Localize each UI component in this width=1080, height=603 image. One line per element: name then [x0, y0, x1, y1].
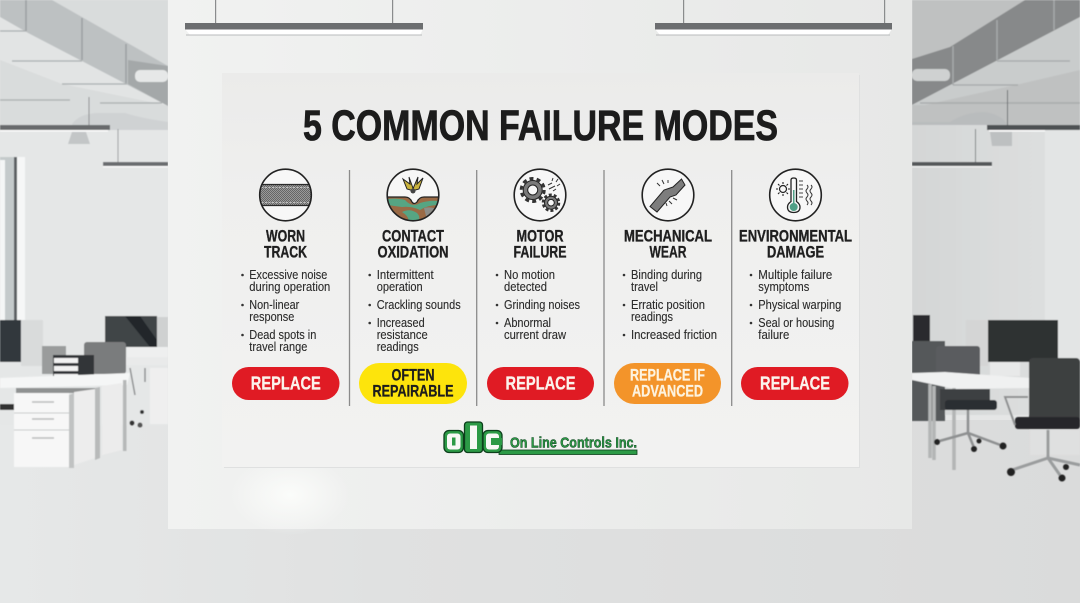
- badge: replace: REPLACE: [251, 374, 321, 394]
- symptom list: motor failure: detected: [504, 279, 547, 294]
- symptom list: mechanical wear: [623, 267, 717, 342]
- symptom list: mechanical wear: readings: [631, 309, 673, 324]
- symptom list: contact oxidation: [368, 267, 461, 354]
- heading: environmental damage: ENVIRONMENTAL: [739, 228, 852, 246]
- symptom list: worn track: during operation: [249, 279, 330, 294]
- symptom list: motor failure: Abnormal: [504, 315, 551, 330]
- symptom list: mechanical wear: travel: [631, 279, 658, 294]
- badge: often repairable: OFTEN: [392, 367, 434, 385]
- heading: mechanical wear: MECHANICAL: [624, 228, 712, 246]
- badge: replace if advanced: REPLACE IF: [630, 367, 705, 385]
- panel: failure modes board: [222, 73, 860, 468]
- symptom list: contact oxidation: operation: [377, 279, 423, 294]
- left office room background: [0, 0, 168, 468]
- heading: motor failure: [514, 228, 566, 261]
- symptom list: contact oxidation: readings: [377, 339, 419, 354]
- badge: replace: [741, 367, 848, 400]
- badge: replace: REPLACE: [760, 374, 830, 394]
- icon: contact oxidation: [386, 169, 440, 222]
- symptom list: environmental damage: Multiple failure: [758, 267, 832, 282]
- title: 5 COMMON FAILURE MODES: [303, 102, 778, 150]
- heading: mechanical wear: WEAR: [650, 243, 687, 261]
- heading: mechanical wear: [624, 228, 712, 261]
- symptom list: motor failure: No motion: [504, 267, 555, 282]
- symptom list: environmental damage: Seal or housing: [758, 315, 834, 330]
- heading: worn track: [264, 228, 307, 261]
- badge: replace if advanced: ADVANCED: [632, 383, 703, 401]
- symptom list: contact oxidation: Crackling sounds: [377, 297, 461, 312]
- column: motor failure: [487, 169, 594, 400]
- heading: environmental damage: [739, 228, 852, 261]
- symptom list: contact oxidation: resistance: [377, 327, 428, 342]
- column: contact oxidation: [359, 169, 467, 404]
- heading: contact oxidation: [378, 228, 448, 261]
- symptom list: motor failure: current draw: [504, 327, 566, 342]
- column: environmental damage: [739, 169, 852, 400]
- badge: often repairable: REPAIRABLE: [372, 383, 454, 401]
- symptom list: mechanical wear: Increased friction: [631, 327, 717, 342]
- heading: worn track: TRACK: [264, 243, 307, 261]
- symptom list: mechanical wear: Binding during: [631, 267, 702, 282]
- symptom list: motor failure: [496, 267, 580, 342]
- wall light glow: [230, 455, 350, 535]
- symptom list: worn track: travel range: [249, 339, 307, 354]
- heading: worn track: WORN: [266, 228, 305, 246]
- badge: replace: [232, 367, 340, 400]
- symptom list: contact oxidation: Intermittent: [377, 267, 434, 282]
- icon: worn track: [258, 169, 314, 221]
- symptom list: environmental damage: Physical warping: [758, 297, 841, 312]
- heading: contact oxidation: CONTACT: [382, 228, 444, 246]
- symptom list: worn track: Dead spots in: [249, 327, 316, 342]
- column dividers: [350, 170, 732, 406]
- symptom list: environmental damage: [750, 267, 841, 342]
- ceiling light right: [655, 0, 892, 36]
- heading: motor failure: MOTOR: [516, 228, 564, 246]
- ceiling light left: [185, 0, 423, 36]
- symptom list: worn track: response: [249, 309, 294, 324]
- symptom list: contact oxidation: Increased: [377, 315, 425, 330]
- right office room background: [912, 0, 1080, 482]
- logo: On Line Controls Inc.: [444, 422, 637, 454]
- column: worn track: [232, 169, 340, 400]
- icon: environmental damage thermometer: [770, 169, 821, 221]
- symptom list: mechanical wear: Erratic position: [631, 297, 705, 312]
- badge: replace if advanced: [614, 363, 721, 404]
- logo: On Line Controls Inc.: On Line Controls Inc.: [510, 434, 637, 452]
- symptom list: worn track: Non-linear: [249, 297, 300, 312]
- symptom list: environmental damage: failure: [758, 327, 789, 342]
- symptom list: worn track: [241, 267, 330, 354]
- heading: motor failure: FAILURE: [514, 243, 566, 261]
- badge: often repairable: [359, 363, 467, 404]
- badge: replace: [487, 367, 594, 400]
- badge: replace: REPLACE: [506, 374, 576, 394]
- symptom list: motor failure: Grinding noises: [504, 297, 580, 312]
- wall: [168, 0, 912, 529]
- floor: [0, 420, 1080, 603]
- heading: contact oxidation: OXIDATION: [378, 243, 448, 261]
- heading: environmental damage: DAMAGE: [767, 243, 824, 261]
- symptom list: environmental damage: symptoms: [758, 279, 810, 294]
- icon: motor failure gears: [514, 169, 566, 221]
- icon: mechanical wear bent bar: [642, 169, 694, 221]
- column: mechanical wear: [614, 169, 721, 404]
- symptom list: worn track: Excessive noise: [249, 267, 327, 282]
